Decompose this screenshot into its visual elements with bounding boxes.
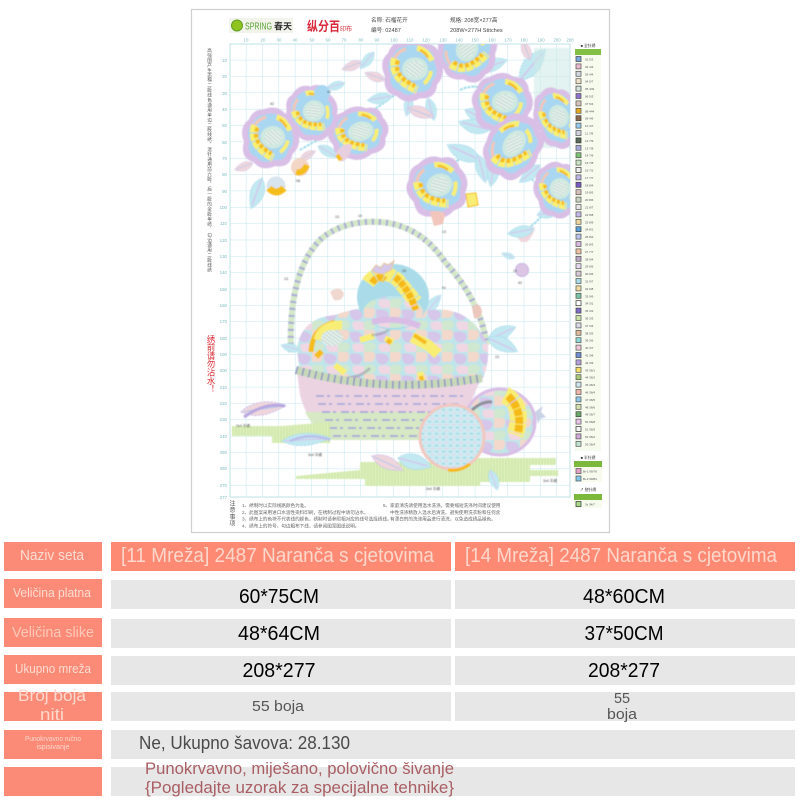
grid row numbers: 30: [222, 91, 228, 96]
grid column numbers: 100: [390, 38, 398, 42]
legend: full stitch table: 11 7/8: [585, 132, 593, 136]
grid column numbers: 40: [293, 38, 298, 42]
row: total grid: Ukupno mreža: [15, 661, 92, 676]
row: total grid: [4, 655, 795, 685]
text: notes right column: 有漂白剂的洗涤用品进行清洗，以免造成绣品褪色。: [390, 516, 496, 522]
legend: full stitch table: 14 7/9: [585, 154, 594, 158]
row: canvas size: 60*75CM: [239, 586, 319, 608]
grid row numbers: 40: [222, 107, 228, 112]
grid row numbers: 240: [220, 434, 228, 439]
text: red wash warning: 绣前请勿沾水！: [206, 334, 216, 393]
legend: full stitch title: ■ 全针绣: [581, 43, 596, 48]
text: notes left column: 3、绣布上的色块不代表线的颜色，绣制时请参照相对应的线号选择绣线。: [242, 516, 392, 522]
legend: full stitch table: 02 4/4: [585, 65, 594, 69]
legend: full stitch table: 29 9/5: [585, 265, 594, 269]
row: special techniques: {Pogledajte uzorak za specijalne tehnike}: [145, 778, 454, 797]
row: set name: [4, 542, 795, 571]
grid row numbers: 277: [220, 495, 228, 500]
grid row numbers: 90: [222, 189, 228, 194]
text: notes heading: 注意事项: [228, 499, 235, 528]
legend: full stitch table: 52 36/2: [585, 435, 595, 439]
legend: full stitch table: 46 36/4: [585, 390, 595, 394]
legend: full stitch table: 12 7/9: [585, 139, 594, 143]
row: stitch count: Ne, Ukupno šavova: 28.130: [139, 733, 350, 753]
grid row numbers: 260: [220, 466, 228, 471]
row: thread colours: boja: [607, 706, 638, 723]
grid row numbers: 20: [222, 74, 228, 79]
text: product size: 208W×277H Stitches: [450, 28, 503, 34]
artwork: basket leaves: [280, 294, 518, 353]
grid row numbers: 160: [220, 303, 228, 308]
legend: full stitch table: 49 36/7: [585, 413, 595, 417]
row: thread colours: niti: [40, 705, 64, 724]
legend: half stitch group: [574, 455, 602, 482]
legend: full stitch table: 53 36/4: [585, 442, 595, 446]
row: stitch count: [4, 730, 795, 759]
text: stitch annotations: 08: [402, 269, 406, 273]
legend: full stitch table: 43 36/1: [585, 368, 595, 372]
row: picture size: Veličina slike: [12, 624, 94, 641]
grid row numbers: 130: [220, 254, 228, 259]
grid row numbers: 190: [220, 352, 228, 357]
legend: full stitch table: 28 9/4: [585, 257, 594, 261]
row: total grid: 208*277: [242, 660, 316, 682]
artwork: flowers right cluster: [382, 44, 570, 278]
legend: full stitch table: 23 8/9: [585, 220, 594, 224]
legend: half stitch group: B+2 99/84: [583, 477, 597, 481]
artwork: basket handle: [291, 222, 487, 352]
grid column numbers: 170: [504, 38, 512, 42]
legend: full stitch table: 13 7/8: [585, 146, 594, 150]
grid row numbers: [220, 58, 228, 500]
text: notes left column: [242, 502, 392, 530]
legend: full stitch table: 44 36/2: [585, 376, 595, 380]
text: stitch annotations: 42: [270, 102, 274, 106]
artwork: top pomegranate: [357, 261, 429, 330]
text: stitch annotations: 14: [513, 269, 517, 273]
text: stitch annotations: 08: [296, 179, 300, 183]
grid column numbers: 190: [537, 38, 545, 42]
row: special techniques: [4, 759, 795, 797]
text: notes right column: 5、家庭清洗请使用温水洗涤。需要缩短洗涤时间建议使用: [383, 502, 501, 509]
artwork: feathers on the ground: [240, 399, 502, 492]
artwork: green ground: [232, 422, 558, 486]
legend: full stitch table: 25 8/2: [585, 235, 594, 239]
legend: full stitch table: 18 8/4: [585, 183, 594, 187]
text: product size: 规格: 208宽×277高: [450, 16, 498, 24]
legend: full stitch table: 21 8/7: [585, 206, 594, 210]
legend: full stitch table: 05 449: [585, 87, 595, 91]
grid column numbers: 180: [520, 38, 528, 42]
grid row numbers: 200: [220, 368, 228, 373]
grid row numbers: 100: [220, 205, 228, 210]
logo: Spring brand: 春天: [274, 20, 292, 32]
grid column numbers: 60: [326, 38, 331, 42]
artwork: right pomegranate: [465, 389, 546, 455]
legend: full stitch table: 17 7/7: [585, 176, 594, 180]
grid column numbers: 140: [455, 38, 463, 42]
row: set name: Naziv seta: [20, 547, 85, 564]
legend: full stitch table: 01 5/3: [585, 58, 594, 62]
text: stitch annotations: 3x4 平绣: [308, 452, 322, 457]
grid row numbers: 230: [220, 417, 228, 422]
legend: full stitch table: 47 36/5: [585, 398, 595, 402]
legend: full stitch table: 34 3/1: [585, 302, 594, 306]
text: stitch annotations: 3x4 平绣: [426, 486, 440, 491]
grid row numbers: 220: [220, 401, 228, 406]
row: stitch count: Punokrvavno ručno: [25, 736, 81, 743]
legend: full stitch table: 50 36/8: [585, 420, 595, 424]
text: vertical thread note: 高强国产生态棉二股线色通用单边二股线绣，混针通用前六股，后一股的全股单绣， 勾边通用二股线绣: [207, 47, 212, 273]
grid column numbers: 150: [471, 38, 479, 42]
legend: full stitch table: 33 9/9: [585, 294, 594, 298]
text: notes left column: 2、此图案采用进口水溶性染料印刷，在绣制过程中请勿沾水。: [242, 509, 369, 516]
grid column numbers: 208: [566, 38, 574, 42]
legend: full stitch table: 48 36/6: [585, 405, 595, 409]
legend: full stitch table: 35 3/2: [585, 309, 594, 313]
grid row numbers: 120: [220, 238, 228, 243]
legend: full stitch table: 32 9/8: [585, 287, 594, 291]
legend: half stitch group: B+1 99/78: [583, 470, 597, 474]
grid row numbers: 250: [220, 450, 228, 455]
artwork: cut pomegranate: [420, 405, 484, 470]
grid row numbers: 80: [222, 172, 228, 177]
artwork: basket body: [296, 370, 482, 440]
legend: full stitch table: 03 4/4: [585, 72, 594, 76]
row: picture size: 37*50CM: [584, 623, 664, 645]
legend: full stitch table: 22 8/8: [585, 213, 594, 217]
legend: full stitch table: 04 5/7: [585, 80, 594, 84]
legend: half stitch group: ■ 半针绣: [581, 455, 596, 460]
grid row numbers: 60: [222, 140, 228, 145]
text: stitch annotations: 41: [442, 286, 446, 290]
logo: red brand: 印布: [340, 25, 352, 33]
legend: full stitch table: 39 3/6: [585, 339, 594, 343]
logo: Spring brand: SPRING: [245, 22, 272, 32]
artwork: pomegranate flowers and basket: [232, 44, 570, 491]
grid column numbers: 130: [439, 38, 447, 42]
grid column numbers: 50: [310, 38, 315, 42]
text: stitch annotations: 3x4 平绣: [543, 478, 557, 483]
legend: full stitch table: [575, 49, 601, 451]
grid column numbers: 160: [488, 38, 496, 42]
grid row numbers: 270: [220, 483, 228, 488]
grid row numbers: 210: [220, 385, 228, 390]
row: stitch count: ispisivanje: [36, 744, 70, 751]
legend: full stitch table: 19 8/5: [585, 191, 594, 195]
text: notes left column: 1、绣制时以实际线路颜色为准。: [242, 502, 309, 509]
text: stitch annotations: 13: [284, 277, 288, 281]
grid column numbers: 90: [375, 38, 380, 42]
legend: full stitch table: 30 9/6: [585, 272, 594, 276]
row: canvas size: 48*60CM: [583, 586, 665, 608]
table: specifications: [4, 542, 795, 797]
legend: full stitch table: 06 5/3: [585, 94, 594, 98]
panel: pattern chart sheet: [192, 10, 610, 532]
legend: full stitch table: 07 5/4: [585, 102, 594, 106]
text: product name and code: [371, 16, 408, 34]
text: notes right column: 中性洗涤精放入温水后清洗。避免使用洗衣粉和任何含: [390, 509, 501, 516]
row: picture size: 48*64CM: [238, 623, 320, 645]
text: product name and code: 编号: 02487: [371, 26, 401, 34]
legend: full stitch table: 51 36/9: [585, 428, 595, 432]
row: canvas size: Veličina platna: [13, 585, 92, 600]
legend: full stitch table: 09 4/6: [585, 117, 594, 121]
grid column numbers: 120: [422, 38, 430, 42]
legend: full stitch table: 45 36/3: [585, 383, 595, 387]
legend: back stitch group: ↗ 绕针绣: [580, 487, 596, 492]
logo: red brand: 纵分百: [307, 19, 340, 34]
grid column numbers: 20: [261, 38, 266, 42]
grid column numbers: 10: [244, 38, 249, 42]
grid column numbers: 30: [277, 38, 282, 42]
legend: full stitch table: 08 444: [585, 109, 595, 113]
row: canvas size: [4, 579, 795, 609]
legend: full stitch table: 10 4/7: [585, 124, 594, 128]
legend: full stitch table: 26 8/3: [585, 242, 594, 246]
row: thread colours: [4, 686, 795, 724]
artwork: upper flower branch: [299, 44, 554, 228]
grid column numbers: 70: [342, 38, 347, 42]
text: stitch annotations: 13: [335, 215, 339, 219]
grid column numbers: 110: [406, 38, 414, 42]
grid row numbers: 110: [220, 221, 228, 226]
text: stitch annotations: 13: [442, 230, 446, 234]
row: set name: [11 Mreža] 2487 Naranča s cjetovima: [121, 545, 435, 567]
chart: cross stitch grid: [220, 13, 590, 500]
logo: Spring brand: [229, 18, 293, 33]
grid column numbers: 80: [359, 38, 364, 42]
grid row numbers: 170: [220, 319, 228, 324]
legend: back stitch group: 3x 34/7: [585, 502, 595, 506]
artwork: flowers left cluster: [234, 84, 389, 210]
grid row numbers: 150: [220, 287, 228, 292]
legend: back stitch group: [574, 487, 602, 508]
text: stitch annotations: [236, 90, 557, 491]
row: special techniques: Punokrvavno, miješano, polovično šivanje: [145, 759, 454, 778]
legend: full stitch table: 16 7/2: [585, 168, 594, 172]
legend: full stitch table: 42 3/9: [585, 361, 594, 365]
text: product size: [450, 16, 503, 34]
row: thread colours: 55 boja: [252, 698, 305, 715]
text: stitch annotations: 42: [327, 90, 331, 94]
grid row numbers: 140: [220, 270, 228, 275]
row: set name: [14 Mreža] 2487 Naranča s cjetovima: [465, 545, 778, 567]
legend: full stitch table: 41 3/8: [585, 354, 594, 358]
text: stitch annotations: 3x4 平绣: [236, 423, 250, 428]
row: total grid: 208*277: [588, 660, 660, 682]
legend: full stitch table: 38 3/5: [585, 331, 594, 335]
legend: full stitch table: 24 8/1: [585, 228, 594, 232]
legend: full stitch table: 20 8/6: [585, 198, 594, 202]
text: stitch annotations: 13: [495, 355, 499, 359]
row: thread colours: Broj boja: [18, 686, 87, 705]
text: product name and code: 名称: 石榴花开: [371, 16, 408, 24]
text: stitch annotations: 14: [358, 214, 362, 218]
grid row numbers: 70: [222, 156, 228, 161]
grid column numbers: 200: [553, 38, 561, 42]
text: stitch annotations: 42: [518, 281, 522, 285]
legend: full stitch table: 27 7/7: [585, 250, 594, 254]
grid row numbers: 180: [220, 336, 228, 341]
legend: full stitch table: 31 9/7: [585, 280, 594, 284]
legend: full stitch table: 36 3/3: [585, 316, 594, 320]
text: notes right column: [383, 502, 501, 522]
row: picture size: [4, 618, 795, 648]
grid column numbers: [244, 38, 574, 42]
legend: full stitch table: 37 3/4: [585, 324, 594, 328]
legend: full stitch table: 40 3/7: [585, 346, 594, 350]
row: thread colours: 55: [614, 690, 630, 707]
artwork: fruit mound: [297, 288, 488, 392]
grid row numbers: 50: [222, 123, 228, 128]
text: notes left column: 4、绣布上的符号、勾边粗布下线，请参阅图案图纸说明。: [242, 522, 359, 530]
grid row numbers: 10: [222, 58, 228, 63]
legend: full stitch table: 15 7/8: [585, 161, 594, 165]
